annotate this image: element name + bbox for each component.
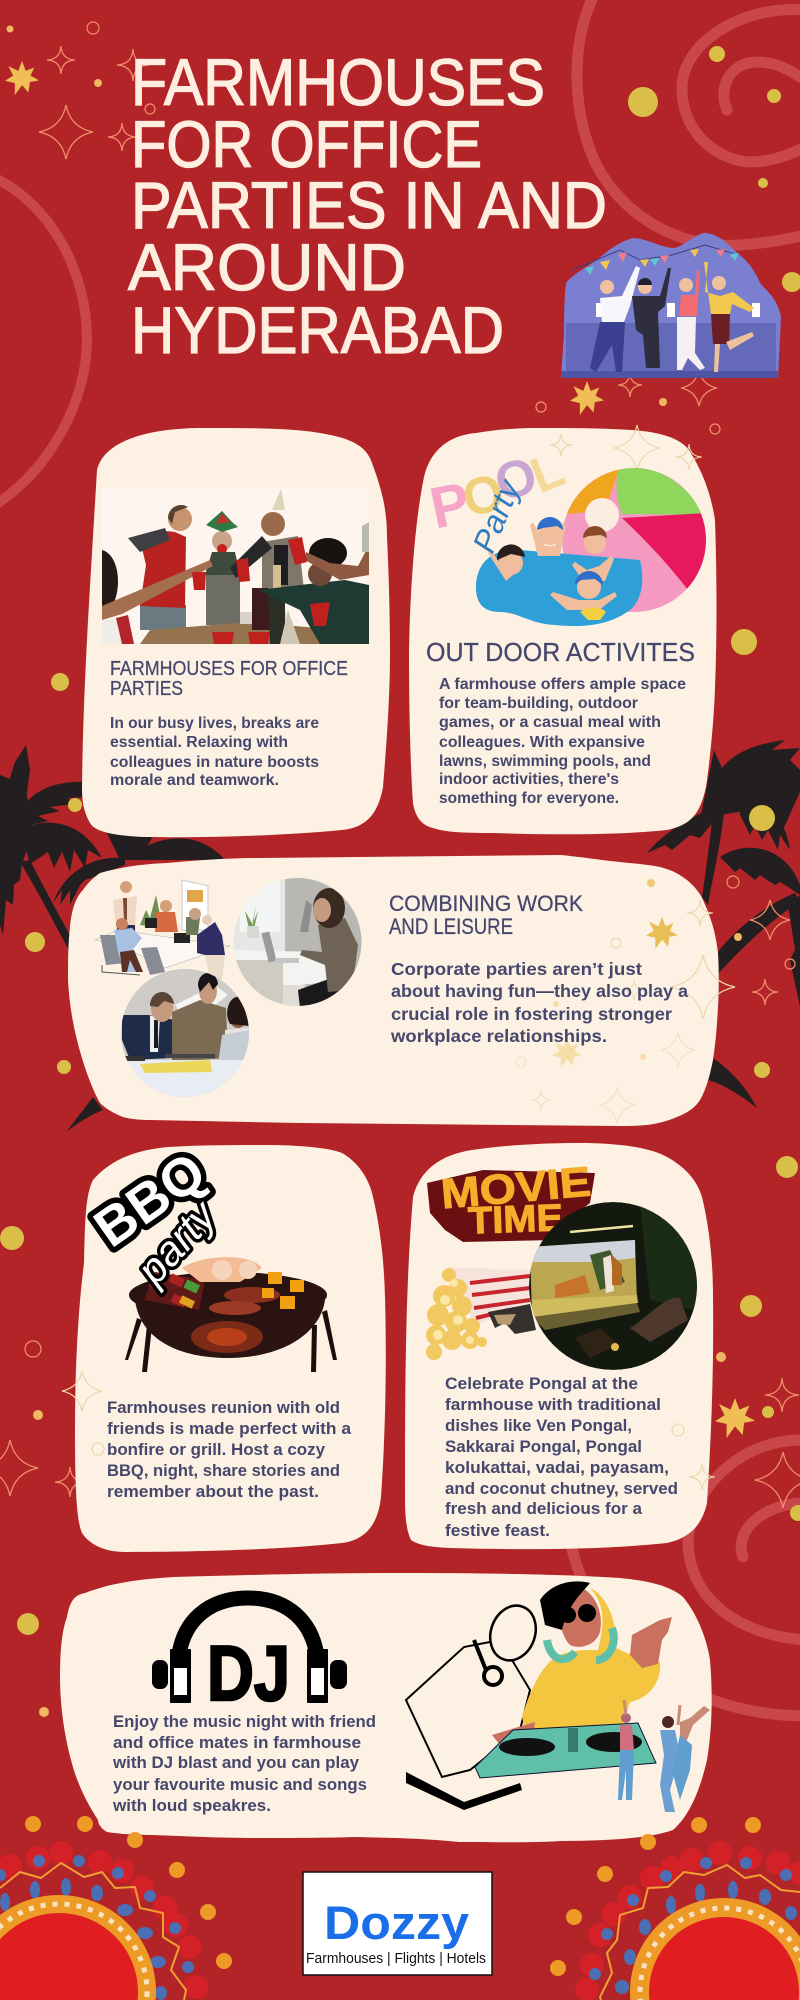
lettering: pool party: O	[489, 446, 543, 513]
lettering: pool party: O	[457, 463, 510, 529]
panel: movie time	[405, 1143, 715, 1549]
body text: remember about the past.	[107, 1483, 319, 1501]
body text: BBQ, night, share stories and	[107, 1462, 340, 1480]
lettering: bbq party: party	[126, 1190, 227, 1294]
bottom mandala: left	[0, 1841, 208, 2000]
title: AROUND	[128, 230, 406, 304]
faint confetti on panel	[516, 879, 735, 1123]
heading: AND LEISURE	[389, 914, 513, 939]
palm tree: right	[647, 740, 800, 1108]
logo: dozzy: Dozzy	[324, 1896, 469, 1949]
decorative stars on panel	[550, 425, 702, 471]
illustration: office party dancers	[561, 233, 781, 378]
body text: kolukattai, vadai, payasam,	[445, 1459, 669, 1477]
body text: and office mates in farmhouse	[113, 1734, 361, 1752]
body text	[110, 715, 319, 789]
panel: outdoor activities	[409, 425, 716, 834]
lettering: movie time	[427, 1158, 595, 1243]
illustration: pool party	[476, 466, 712, 626]
panel: farmhouses for office parties	[82, 428, 390, 837]
heading: OUT DOOR ACTIVITES	[426, 637, 695, 667]
body text: about having fun—they also play a	[391, 981, 688, 1001]
heading	[389, 891, 583, 939]
illustration: popcorn and 3d glasses	[426, 1267, 536, 1360]
body text: A farmhouse offers ample space	[439, 676, 686, 693]
lettering: pool party: L	[522, 441, 572, 504]
heading: FARMHOUSES FOR OFFICE	[110, 658, 348, 680]
body text: for team-building, outdoor	[439, 695, 638, 712]
body text: your favourite music and songs	[113, 1776, 367, 1794]
logo: dozzy	[303, 1872, 492, 1975]
body text: In our busy lives, breaks are	[110, 715, 319, 732]
body text: farmhouse with traditional	[445, 1396, 661, 1414]
body text: essential. Relaxing with	[110, 734, 288, 751]
icon: dj headphones logo: DJ	[207, 1629, 290, 1717]
illustration: team meeting around a table	[95, 880, 230, 980]
body text: Celebrate Pongal at the	[445, 1375, 638, 1393]
body text: with loud speakres.	[112, 1797, 271, 1815]
panel: combining work and leisure	[68, 855, 735, 1126]
title: FOR OFFICE	[131, 107, 482, 181]
body text	[112, 1713, 376, 1815]
body text	[439, 676, 686, 807]
title: PARTIES IN AND	[131, 168, 607, 242]
body text: colleagues in nature boosts	[110, 754, 319, 771]
body text: friends is made perfect with a	[107, 1420, 352, 1438]
swirl: left arc	[0, 178, 87, 505]
body text: games, or a casual meal with	[439, 714, 661, 731]
swirl: bottom right	[570, 1440, 800, 1716]
heading	[110, 658, 348, 700]
body text: with DJ blast and you can play	[112, 1754, 360, 1772]
body text: crucial role in fostering stronger	[391, 1004, 672, 1024]
palm tree: left	[0, 745, 225, 1131]
illustration: dj at the decks	[406, 1581, 672, 1810]
body text	[390, 959, 688, 1046]
logo: dozzy: Farmhouses | Flights | Hotels	[306, 1951, 486, 1967]
heading: COMBINING WORK	[389, 891, 583, 916]
body text: bonfire or grill. Host a cozy	[107, 1441, 326, 1459]
body text: lawns, swimming pools, and	[439, 753, 651, 770]
lettering: pool party: Party	[465, 473, 528, 558]
icon: dj headphones logo	[152, 1598, 347, 1717]
body text: something for everyone.	[439, 790, 619, 807]
body text: workplace relationships.	[390, 1026, 607, 1046]
panel: dj music night	[60, 1573, 712, 1842]
lettering: bbq party: BBQ	[84, 1141, 216, 1259]
photo: colleagues toasting	[102, 488, 369, 644]
body text	[107, 1399, 352, 1501]
lettering: movie time: MOVIE	[439, 1158, 593, 1217]
title: FARMHOUSES	[131, 45, 545, 119]
body text: morale and teamwork.	[110, 772, 279, 789]
swirl: top right	[577, 0, 800, 245]
illustration: barbecue grill	[125, 1257, 337, 1372]
body text	[445, 1375, 678, 1540]
body text: and coconut chutney, served	[445, 1480, 678, 1498]
bottom mandala: right	[575, 1841, 800, 2000]
heading: PARTIES	[110, 678, 183, 700]
faint stars on panel	[62, 1371, 104, 1455]
title	[128, 45, 607, 367]
faint decoration on panel	[672, 1424, 715, 1490]
body text: dishes like Ven Pongal,	[445, 1417, 632, 1435]
body text: Corporate parties aren’t just	[391, 959, 642, 979]
body text: Sakkarai Pongal, Pongal	[445, 1438, 642, 1456]
body text: Farmhouses reunion with old	[107, 1399, 340, 1417]
body text: fresh and delicious for a	[445, 1500, 643, 1518]
lettering: movie time: TIME	[467, 1197, 564, 1243]
body text: indoor activities, there's	[439, 771, 619, 788]
photo: woman at laptop	[233, 878, 363, 1008]
illustration: dancers	[618, 1700, 710, 1812]
panel: bbq party	[62, 1141, 386, 1552]
body text: festive feast.	[445, 1522, 550, 1540]
body text: Enjoy the music night with friend	[113, 1713, 376, 1731]
body text: colleagues. With expansive	[439, 734, 645, 751]
orange festive dots	[25, 1816, 761, 1976]
lettering: pool party: P	[424, 470, 476, 541]
title: HYDERABAD	[131, 293, 504, 367]
photo: outdoor movie screen	[529, 1202, 697, 1370]
lettering: pool party	[424, 441, 572, 558]
photo: three colleagues over documents	[121, 969, 250, 1099]
